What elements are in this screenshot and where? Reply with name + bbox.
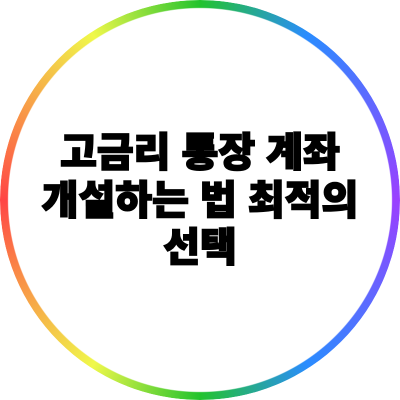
title line 3: 선택: [163, 226, 237, 270]
title: [41, 131, 358, 270]
title line 1: 고금리 통장 계좌: [60, 131, 340, 175]
title line 2: 개설하는 법 최적의: [42, 179, 358, 223]
